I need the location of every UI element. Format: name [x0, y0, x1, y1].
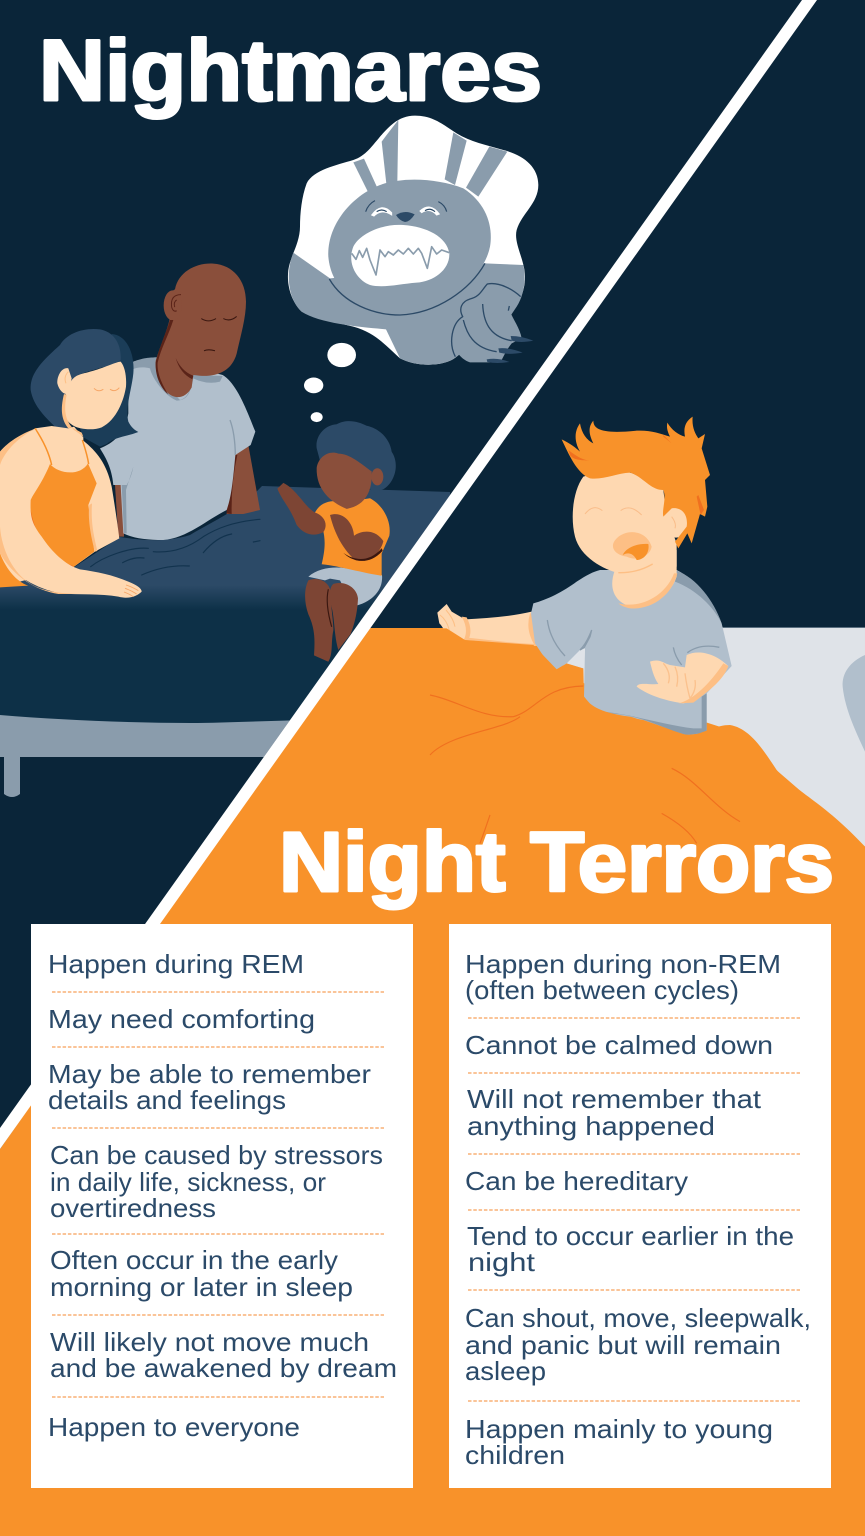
fact: remember: May be able to remember	[48, 1059, 371, 1089]
fact: behaviour: asleep	[465, 1356, 546, 1386]
fact: young children: children	[465, 1440, 565, 1470]
fact: not remember	[467, 1084, 762, 1141]
fact: causes: Can be caused by stressors	[50, 1140, 383, 1170]
woman: tank top	[0, 428, 97, 587]
thought bubble with monster	[288, 116, 538, 365]
fact: timing: morning or later in sleep	[50, 1272, 353, 1302]
bed mattress	[0, 610, 368, 723]
blanket front	[420, 628, 865, 943]
fact: non-REM: Happen during non-REM	[465, 949, 781, 979]
bubble outline	[288, 116, 538, 365]
bed frame	[0, 715, 320, 797]
man: head and neck	[156, 263, 246, 397]
fact: timing	[50, 1245, 353, 1302]
boy: head	[573, 471, 688, 574]
fact: remember: details and feelings	[48, 1085, 286, 1115]
fact: earlier	[467, 1221, 794, 1277]
monster head	[328, 180, 491, 311]
child: head	[317, 453, 383, 509]
boy: near arm and hand	[637, 652, 728, 703]
fact: hereditary: Can be hereditary	[465, 1166, 688, 1196]
monster hand with claws	[452, 283, 533, 363]
child: shirt	[315, 498, 390, 576]
panel: night terrors orange background	[0, 628, 865, 1536]
fact: movement: Will likely not move much	[50, 1327, 369, 1357]
fact: not remember: anything happened	[467, 1111, 715, 1141]
monster mouth	[351, 225, 449, 286]
woman: face and torso	[0, 362, 126, 587]
fact: movement: and be awakened by dream	[50, 1353, 397, 1383]
fact: non-REM	[465, 949, 781, 1005]
fact: causes	[50, 1140, 383, 1223]
fact: not remember: Will not remember that	[467, 1084, 762, 1114]
illustration: family on bed	[0, 263, 450, 797]
fact: behaviour	[465, 1303, 811, 1386]
fact: earlier: night	[468, 1247, 536, 1277]
pillow	[843, 655, 865, 752]
child: arms	[277, 483, 383, 561]
boy: orange hair	[562, 417, 710, 548]
man: t-shirt	[100, 357, 255, 540]
fact: calmed: Cannot be calmed down	[465, 1030, 773, 1060]
fact: movement	[50, 1327, 397, 1383]
fact: behaviour: and panic but will remain	[465, 1330, 781, 1360]
thought bubbles	[304, 343, 356, 422]
child: shorts	[308, 568, 382, 606]
fact: timing: Often occur in the early	[50, 1245, 338, 1275]
monster chin line	[329, 263, 485, 315]
monster eyes and nose	[366, 201, 447, 222]
sheet gap under sleeve	[567, 648, 585, 668]
blanket	[0, 486, 450, 610]
monster ears	[353, 120, 507, 197]
blanket folds	[430, 686, 740, 843]
man: arms behind shirt	[115, 445, 260, 537]
fact: causes: in daily life, sickness, or	[50, 1167, 326, 1197]
blanket folds	[91, 519, 260, 575]
panel: night terrors facts	[449, 924, 831, 1488]
woman: arm and hand	[0, 429, 142, 598]
child: legs and feet	[305, 579, 358, 662]
fact: REM: Happen during REM	[48, 949, 304, 979]
sheet	[563, 628, 865, 847]
fact: earlier: Tend to occur earlier in the	[467, 1221, 794, 1251]
title: Nightmares: Nightmares	[39, 23, 542, 119]
fact: causes: overtiredness	[50, 1193, 216, 1223]
boy: open mouth	[613, 532, 652, 559]
boy: far arm and hand	[437, 604, 537, 646]
woman: hair	[31, 329, 138, 447]
fact: non-REM: (often between cycles)	[465, 975, 739, 1005]
panel: nightmares facts	[31, 924, 413, 1488]
fact: comforting: May need comforting	[48, 1004, 315, 1034]
boy: neck	[612, 550, 677, 607]
title: Night Terrors: Night Terrors	[279, 815, 834, 909]
diagonal divider line	[0, 0, 817, 1149]
boy: t-shirt	[531, 570, 732, 735]
child: hair	[316, 421, 396, 493]
fact: everyone: Happen to everyone	[48, 1412, 300, 1442]
fact: young children	[465, 1414, 773, 1470]
fact: remember	[48, 1059, 371, 1115]
fact: young children: Happen mainly to young	[465, 1414, 773, 1444]
monster body	[289, 253, 525, 365]
fact: behaviour: Can shout, move, sleepwalk,	[465, 1303, 811, 1333]
illustration: boy in bed	[420, 417, 865, 943]
